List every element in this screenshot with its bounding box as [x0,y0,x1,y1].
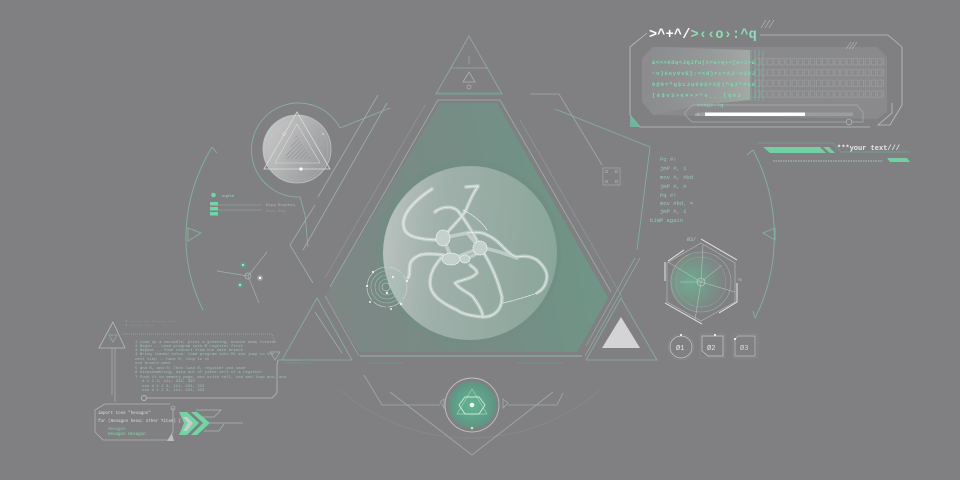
green text rows [652,60,756,99]
progress bar [685,102,863,125]
green text rows: [é$v3>é#+>^v___[qéJ___ [652,93,756,99]
diagonal lines left [290,95,387,283]
panel: code block: • ----- -- ------ --- [125,320,175,324]
code listing [650,156,693,224]
button 02 [700,334,725,358]
panel: code block: 4 Bring loaded value, load program into R1 and jump to the [135,352,275,357]
bottom chevron lines [364,375,563,455]
code listing: bJmP again [650,217,683,224]
legend with stacked bars: Hvpq Bvqabvq [266,203,295,208]
panel: import box: Hexagon [108,428,126,432]
panel: code block: 2 Begin -- Load program into Ø register first [135,344,243,349]
panel: code block: 3 Repeat -- Then restart from the data branch [135,348,244,353]
title: data decoding: >^+^/ [649,28,691,43]
organism illustration [403,186,547,317]
legend with stacked bars: sq#1# [222,195,235,199]
panel: code block: 6 Disassembling, data out of piece cell of a register [135,370,263,375]
green text rows: ~v}éuyév$}:<<d}rc=éJ~vJëJ [652,71,755,77]
hexagon radar widget: Ø3/ [687,236,696,243]
icon: small square [603,168,620,185]
button 01: Ø1 [676,344,684,353]
panel: import box: import tone "hexagon" [98,411,151,416]
code listing: jmP #, 1 [660,165,687,172]
hexagon radar widget [665,236,742,324]
sphere [377,160,561,344]
upper right connector lines [530,94,650,250]
icon: green chevrons [179,410,243,435]
panel: code block: • ----- ---- [125,324,154,328]
code listing: mov #bd, = [660,200,693,207]
node diagram [217,252,267,303]
panel: import box: Hexagon Hexagon [108,433,146,437]
panel: code block: next step -- have R, loop to it [135,357,209,362]
left triangle disk widget [251,103,390,247]
radar widget [366,267,408,310]
bottom-right triangle with white fill [586,298,657,360]
button 03 [733,334,758,358]
code listing: Pq #! [660,192,677,199]
panel: code block: 5 And R, and R; Then load R, register and save [135,366,246,371]
title: data decoding: >‹‹o›:^q [691,28,757,43]
faint lower arc [340,390,600,438]
button 02: Ø2 [707,344,715,353]
code listing: Pq #! [660,156,677,163]
panel: code block: use branch addr [135,361,172,366]
panel: code block: 1 Load up a variable, print a greeting, bounce away forever [135,340,277,345]
progress bar: 0% [695,114,700,118]
panel: code block [99,320,300,402]
panel: code block: # 1 2 3, 111, 222, 333 [142,380,195,384]
your text header: ***your text/// [837,145,900,153]
green text rows: &<<<éöq<JqJfu(t=≤+q+<[u+J+£ [652,60,756,66]
hexagon radar widget: 7% [737,279,742,283]
code listing: mov #, #bd [660,174,693,181]
legend with stacked bars: Hvpq Bvq [266,210,286,214]
your text header [758,143,910,162]
panel: code block: use # 1 2 3, 111, 222, 333 [142,389,205,393]
panel: data decoding [630,20,902,127]
panel: import box [95,404,181,441]
panel: code block: 7 Push it to memory page, and write cell, use and loop and, and [135,375,287,380]
button 01 [668,334,694,360]
code listing: jmP #, 1 [660,208,687,215]
left arc [186,147,217,310]
top small triangle [436,36,502,94]
progress bar: ><<o>:^q [697,102,723,109]
bottom-left triangle [282,298,352,363]
bottom emblem [445,378,499,432]
legend with stacked bars [210,193,295,216]
code listing: jmP #, # [660,183,687,190]
green text rows: 0@9=^q$cJué03>3@)^qJ^#qé [652,82,755,88]
panel: code block: use # 1 2 3, 111, 222, 333 [142,385,205,389]
button 03: Ø3 [740,344,748,353]
panel: import box: for (Hexagon hexa: other Titan) { [98,419,181,424]
panel: central triangle [325,100,640,363]
right arc [747,150,775,318]
